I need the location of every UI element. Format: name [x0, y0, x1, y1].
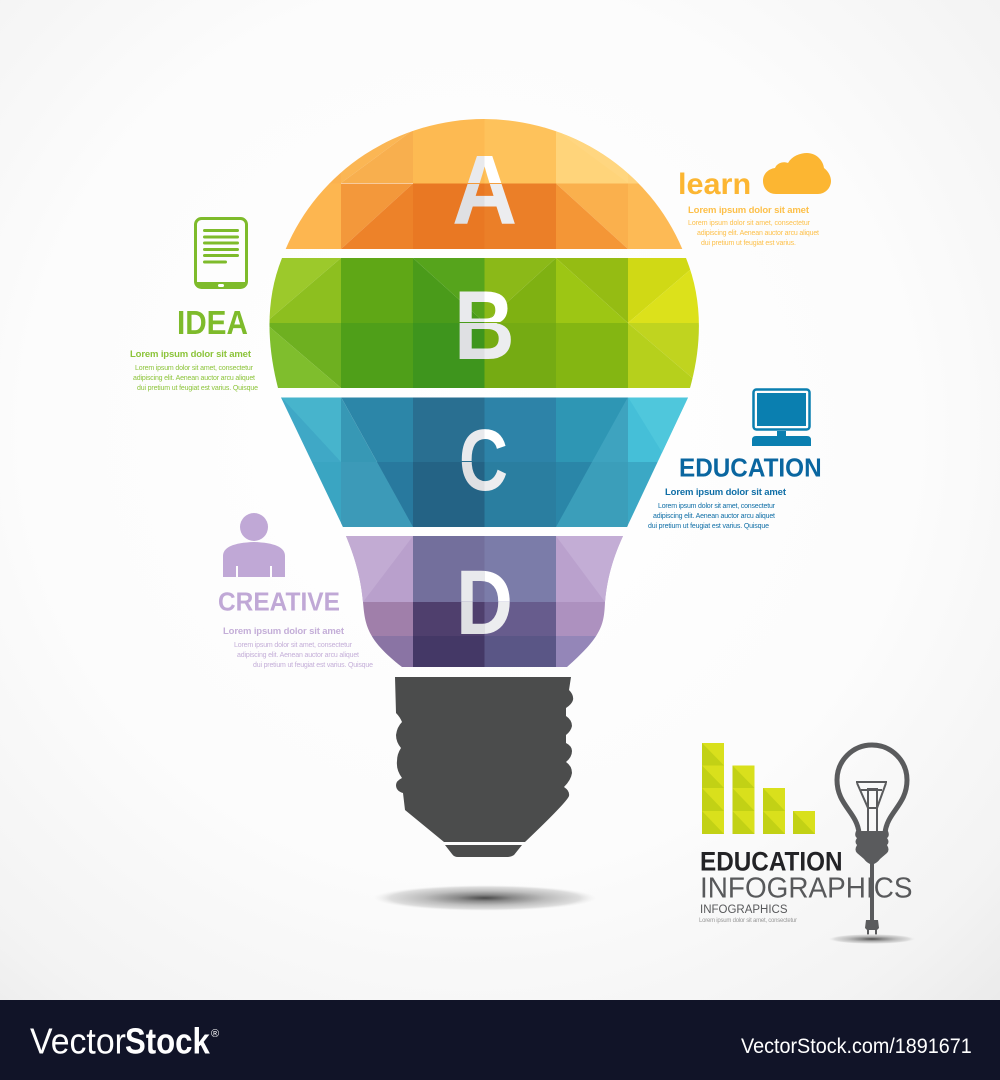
learn text: Lorem ipsum dolor sit amet, consectetur — [688, 220, 811, 227]
education text: Lorem ipsum dolor sit amet — [665, 487, 787, 498]
footer title text — [699, 847, 913, 924]
mini bar chart — [702, 743, 815, 834]
creative text: Lorem ipsum dolor sit amet — [223, 626, 345, 637]
education text: dui pretium ut feugiat est varius. Quisque — [648, 523, 769, 530]
image id: VectorStock.com/1891671 — [741, 1034, 972, 1058]
callout: creative — [218, 513, 373, 669]
letter B — [454, 276, 540, 374]
education text — [648, 487, 787, 530]
icon: small light bulb with plug — [837, 745, 907, 936]
callout: idea — [130, 218, 258, 392]
idea heading: IDEA — [177, 305, 248, 341]
bulb segment D: purple — [340, 536, 628, 667]
footer title text: INFOGRAPHICS — [700, 871, 913, 904]
bulb segment C: blue — [275, 397, 694, 527]
letter A — [452, 141, 544, 239]
icon: tablet — [196, 218, 246, 288]
learn heading: learn — [678, 168, 751, 201]
icon: person — [223, 513, 285, 577]
bulb segment A: orange — [286, 119, 682, 249]
footer title text: EDUCATION — [700, 847, 843, 877]
idea text: Lorem ipsum dolor sit amet, consectetur — [135, 365, 254, 372]
letter D — [456, 558, 542, 650]
idea text: adipiscing elit. Aenean auctor arcu aliquet — [133, 375, 255, 382]
learn text: dui pretium ut feugiat est varius. — [701, 240, 796, 247]
VectorStock logo — [30, 1022, 219, 1062]
creative text: dui pretium ut feugiat est varius. Quisque — [253, 662, 373, 669]
learn text: Lorem ipsum dolor sit amet — [688, 205, 810, 216]
creative text: Lorem ipsum dolor sit amet, consectetur — [234, 642, 353, 649]
education heading: EDUCATION — [679, 454, 822, 483]
icon: cloud — [763, 153, 831, 194]
idea text — [130, 349, 258, 392]
VectorStock logo: Vector — [30, 1022, 126, 1062]
creative text: adipiscing elit. Aenean auctor arcu aliquet — [237, 652, 359, 659]
creative text — [223, 626, 373, 669]
callout: learn — [678, 153, 831, 247]
icon: monitor — [752, 390, 811, 446]
idea text: Lorem ipsum dolor sit amet — [130, 349, 252, 360]
letter C — [459, 417, 537, 504]
callout: education — [648, 390, 822, 530]
creative heading: CREATIVE — [218, 588, 340, 617]
VectorStock logo: Stock — [125, 1022, 210, 1062]
footer banner — [0, 1000, 1000, 1080]
education text: Lorem ipsum dolor sit amet, consectetur — [658, 503, 776, 510]
bulb screw base — [395, 677, 573, 857]
small bulb shadow — [828, 934, 916, 944]
education text: adipiscing elit. Aenean auctor arcu aliquet — [653, 513, 775, 520]
bulb segment B: green — [265, 258, 704, 388]
learn text: adipiscing elit. Aenean auctor arcu aliquet — [697, 230, 819, 237]
VectorStock logo: ® — [211, 1028, 219, 1040]
footer title text: Lorem ipsum dolor sit amet, consectetur — [699, 918, 797, 924]
footer title text: INFOGRAPHICS — [700, 904, 788, 916]
learn text — [688, 205, 819, 247]
idea text: dui pretium ut feugiat est varius. Quisque — [137, 385, 258, 392]
bulb ground shadow — [373, 885, 597, 911]
